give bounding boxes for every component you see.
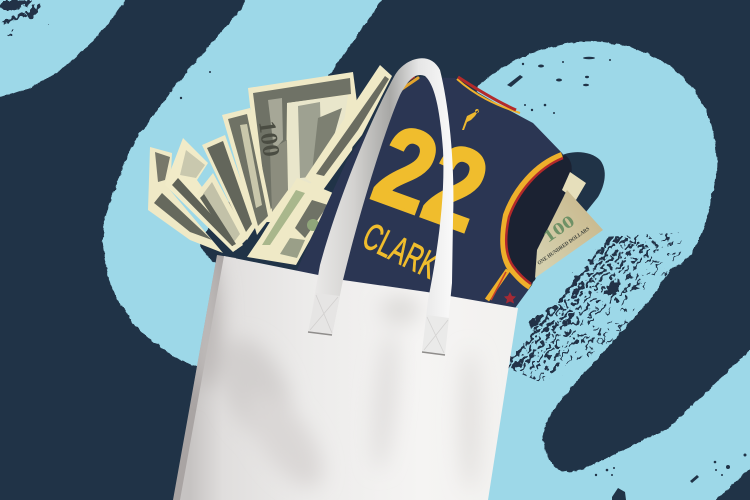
bill in armhole <box>535 172 603 278</box>
bill: large back: 100 <box>253 119 284 158</box>
bill: far left <box>148 147 223 253</box>
right collar stripe <box>457 77 520 113</box>
bill: front <box>247 178 333 265</box>
left handle tab <box>308 293 340 335</box>
tote bag <box>173 250 518 500</box>
dark blob inside the loop <box>558 152 605 212</box>
bill: small front-left <box>197 173 248 250</box>
brush stroke: left curve <box>102 0 385 368</box>
bill: third <box>222 108 272 235</box>
jersey body <box>290 77 572 315</box>
league logo <box>462 109 479 130</box>
bag handles <box>308 58 453 355</box>
stack of hundred dollar bills <box>148 65 392 265</box>
star <box>504 292 516 304</box>
brush stroke: right loop and lower sweep <box>470 41 750 500</box>
bill: right strip <box>305 65 392 188</box>
jersey number: 22 <box>359 101 502 257</box>
jersey <box>290 77 572 315</box>
bag front panel <box>180 256 518 500</box>
jersey name: CLARK <box>356 215 445 287</box>
left collar stripe <box>397 77 418 91</box>
bill: fourth <box>202 135 257 240</box>
brush texture specks <box>508 232 682 382</box>
bag side panel <box>173 255 236 500</box>
bag fold shadows <box>189 250 480 499</box>
bill: second from left <box>165 138 243 252</box>
bill in armhole: 100 <box>539 211 578 246</box>
brush stroke: top-left corner <box>0 0 128 98</box>
bill in armhole: ONE HUNDRED DOLLARS <box>537 226 591 267</box>
armhole trim <box>487 155 563 300</box>
bill: large back <box>248 72 358 222</box>
right handle tab <box>422 315 449 355</box>
armhole interior <box>506 155 572 288</box>
small specks on the blue loop <box>179 57 746 500</box>
top-left specks <box>0 0 47 34</box>
handle strap <box>308 58 453 355</box>
